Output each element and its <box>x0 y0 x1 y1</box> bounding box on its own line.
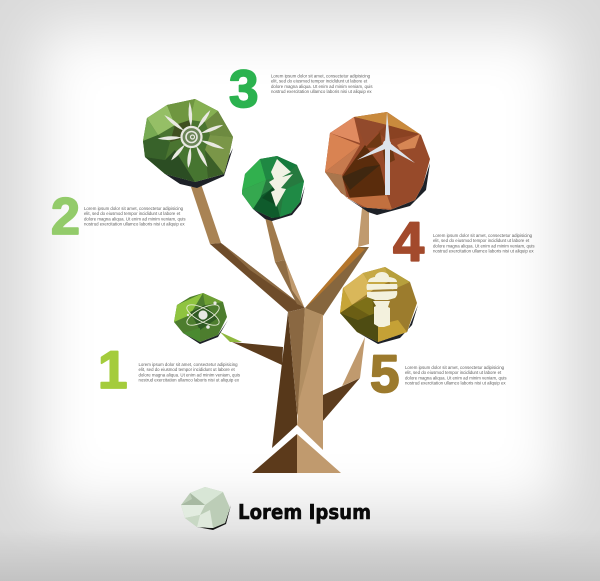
text block 2: Lorem ipsum dolor sit amet, consectetur adipisicing <box>84 206 183 211</box>
tree trunk and branches <box>191 184 369 473</box>
text block 1: Lorem ipsum dolor sit amet, consectetur adipisicing <box>138 362 238 367</box>
trunk <box>272 308 323 450</box>
text block 5: Lorem ipsum dolor sit amet, consectetur adipisicing <box>405 365 504 370</box>
text block 5: dolore magna aliqua. Ut enim ad minim veniam, quis <box>405 375 507 380</box>
branch: to tree 1 atom <box>220 332 283 365</box>
icon: wind turbine <box>357 112 415 195</box>
text block 4: nostrud exercitation ullamco laboris nisi ut aliquip ex <box>433 249 534 254</box>
tree 2: sun crown <box>143 99 233 188</box>
text block 1: elit, sed do eiusmod tempor incididunt ut labore et <box>138 367 235 372</box>
icon: lightning bolt <box>269 159 293 207</box>
tree 4: turbine crown <box>325 112 430 215</box>
text block 2: elit, sed do eiusmod tempor incididunt ut labore et <box>84 211 181 216</box>
text block 3: Lorem ipsum dolor sit amet, consectetur adipisicing <box>271 74 370 78</box>
logo crown <box>181 487 231 530</box>
logo text: Lorem Ipsum <box>238 500 371 524</box>
branch: to tree 2 sun <box>191 184 305 312</box>
tree 1: atom crown <box>174 293 228 344</box>
icon: atom <box>184 301 222 329</box>
branch: to tree 4 turbine <box>305 208 369 316</box>
number 4: 4 <box>393 210 424 273</box>
text block 3: dolore magna aliqua. Ut enim ad minim veniam, quis <box>271 84 373 89</box>
text block 5: nostrud exercitation ullamco laboris nisi ut aliquip ex <box>405 381 506 386</box>
trunk base <box>252 434 341 473</box>
branch: to tree 5 bulb <box>322 337 365 422</box>
branch: to tree 3 bolt <box>265 215 304 307</box>
text block 3: elit, sed do eiusmod tempor incididunt ut labore et <box>271 79 368 84</box>
text block 4: Lorem ipsum dolor sit amet, consectetur adipisicing <box>433 233 532 238</box>
text block 2: nostrud exercitation ullamco laboris nisi ut aliquip ex <box>84 222 185 227</box>
tree 3: bolt crown <box>242 156 305 221</box>
number 1: 1 <box>98 341 127 400</box>
tree 5: bulb crown <box>340 267 418 344</box>
text block 1: nostrud exercitation ullamco laboris nisi ut aliquip ex <box>138 378 240 383</box>
text block 5: elit, sed do eiusmod tempor incididunt ut labore et <box>405 370 502 375</box>
text block 2: dolore magna aliqua. Ut enim ad minim veniam, quis <box>84 216 186 221</box>
text block 4: dolore magna aliqua. Ut enim ad minim veniam, quis <box>433 243 535 248</box>
text block 4: elit, sed do eiusmod tempor incididunt ut labore et <box>433 238 530 243</box>
icon: light bulb <box>366 272 398 327</box>
number 3: 3 <box>229 60 258 119</box>
number 2: 2 <box>51 188 80 246</box>
icon: sun <box>157 102 225 168</box>
text block 3: nostrud exercitation ullamco laboris nisi ut aliquip ex <box>271 89 372 94</box>
number 5: 5 <box>370 345 399 404</box>
text block 1: dolore magna aliqua. Ut enim ad minim veniam, quis <box>138 372 241 377</box>
